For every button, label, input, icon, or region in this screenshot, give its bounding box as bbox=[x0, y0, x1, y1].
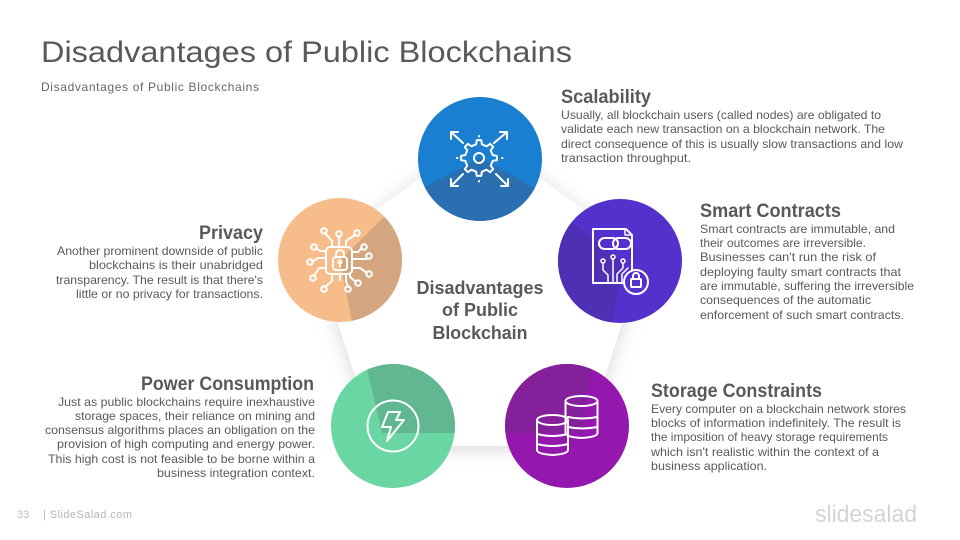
text: smart contracts: Smart contracts are immutable, and bbox=[700, 223, 895, 236]
icon: circuit lock bbox=[307, 228, 372, 292]
circle: smart contracts bbox=[558, 199, 682, 323]
text: privacy: little or no privacy for transactions. bbox=[76, 288, 263, 301]
text: power consumption bbox=[45, 374, 316, 480]
footer logo: slidesalad bbox=[815, 501, 917, 528]
text: smart contracts: deploying faulty smart contracts that bbox=[700, 266, 902, 279]
text: smart contracts bbox=[700, 201, 914, 322]
icon: lightning bolt bbox=[368, 400, 418, 452]
icon: gear with arrows bbox=[451, 132, 508, 186]
text: power consumption: business integration context. bbox=[157, 467, 315, 480]
text: storage constraints: Every computer on a blockchain network stores bbox=[651, 403, 906, 416]
text: power consumption: storage spaces, their reliance on mining and bbox=[75, 410, 315, 423]
center label: Disadvantages bbox=[416, 278, 544, 298]
icon: contract with lock bbox=[593, 229, 648, 294]
text: storage constraints: business application. bbox=[651, 460, 767, 473]
text: privacy: transparency. The result is that there's bbox=[56, 274, 263, 287]
text: smart contracts: are immutable, suffering the irreversible bbox=[700, 280, 914, 293]
text: smart contracts: consequences of the automatic bbox=[700, 294, 871, 307]
text: smart contracts: enforcement of such smart contracts. bbox=[700, 309, 904, 322]
footer site name: | SlideSalad.com bbox=[43, 509, 132, 521]
text: scalability: Usually, all blockchain users (called nodes) are obligated to bbox=[561, 109, 881, 122]
footer page number: 33 bbox=[17, 509, 29, 521]
text: privacy bbox=[56, 223, 263, 301]
text: power consumption: provision of high computing and energy power. bbox=[57, 438, 315, 451]
center label bbox=[416, 278, 544, 343]
text: power consumption: Just as public blockchains require inexhaustive bbox=[58, 396, 315, 409]
text: smart contracts: their outcomes are irreversible. bbox=[700, 237, 866, 250]
title: Disadvantages of Public Blockchains bbox=[41, 36, 572, 69]
text: scalability: Scalability bbox=[561, 87, 651, 108]
text: storage constraints bbox=[650, 381, 906, 473]
text: scalability: validate each new transaction on a blockchain network. The bbox=[561, 123, 885, 136]
text: smart contracts: Businesses can't run the risk of bbox=[700, 251, 877, 264]
text: privacy: blockchains is their unabridged bbox=[89, 259, 263, 272]
circle: scalability bbox=[418, 97, 542, 221]
icon: database stacks bbox=[537, 396, 598, 455]
text: privacy: Privacy bbox=[199, 223, 263, 244]
text: storage constraints: blocks of information indefinitely. The result is bbox=[651, 417, 901, 430]
text: storage constraints: Storage Constraints bbox=[651, 381, 822, 402]
text: power consumption: consensus algorithms places an obligation on the bbox=[45, 424, 315, 437]
text: scalability bbox=[561, 87, 904, 165]
center label: of Public bbox=[442, 300, 518, 320]
circle: privacy bbox=[278, 198, 402, 322]
subtitle: Disadvantages of Public Blockchains bbox=[41, 80, 259, 94]
text: smart contracts: Smart Contracts bbox=[700, 201, 841, 222]
text: privacy: Another prominent downside of public bbox=[57, 245, 263, 258]
text: scalability: direct consequence of this is usually slow transactions and low bbox=[561, 138, 904, 151]
text: power consumption: Power Consumption bbox=[141, 374, 314, 395]
circle: power consumption bbox=[331, 364, 455, 488]
pentagon backdrop bbox=[315, 134, 645, 449]
text: power consumption: This high cost is not feasible to be borne within a bbox=[48, 453, 316, 466]
text: storage constraints: the imposition of heavy storage requirements bbox=[651, 431, 888, 444]
circle: storage constraints bbox=[505, 364, 629, 488]
center label: Blockchain bbox=[432, 323, 528, 343]
text: scalability: transaction throughput. bbox=[561, 152, 691, 165]
text: storage constraints: which isn't realistic within the context of a bbox=[650, 446, 880, 459]
